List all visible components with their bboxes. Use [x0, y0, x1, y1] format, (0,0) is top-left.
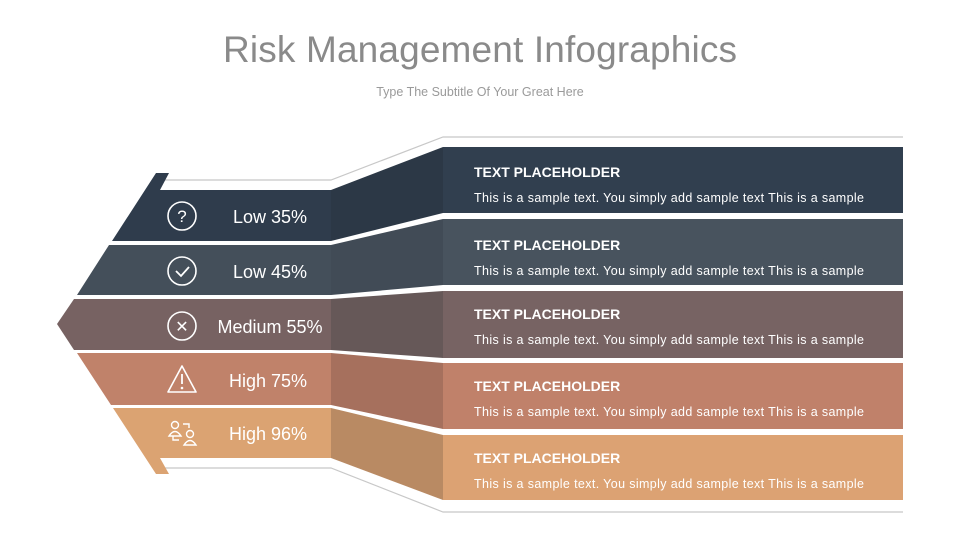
band 4: High 75%: High 75% — [229, 371, 307, 391]
title: Risk Management Infographics — [223, 29, 737, 70]
band 3: Medium 55% — [57, 291, 903, 358]
band 3: Medium 55%: Medium 55% — [217, 317, 323, 337]
band 1: Low 35%: ? — [177, 207, 187, 226]
band 5: High 96%: High 96% — [229, 424, 307, 444]
band 4: High 75%: TEXT PLACEHOLDER — [474, 378, 620, 394]
band 2: Low 45% — [77, 219, 903, 295]
band 3: Medium 55%: TEXT PLACEHOLDER — [474, 306, 620, 322]
band 2: Low 45%: This is a sample text. You simply add sample text This is a sample — [474, 264, 864, 278]
band 3: Medium 55%: This is a sample text. You simply add sample text This is a sample — [474, 333, 864, 347]
band 2: Low 45%: TEXT PLACEHOLDER — [474, 237, 620, 253]
band 5: High 96%: This is a sample text. You simply add sample text This is a sample — [474, 477, 864, 491]
band 1: Low 35% — [112, 147, 903, 241]
band 5: High 96%: TEXT PLACEHOLDER — [474, 450, 620, 466]
outline lines — [160, 137, 903, 512]
band 1: Low 35%: This is a sample text. You simply add sample text This is a sample — [474, 191, 864, 205]
band 1: Low 35%: TEXT PLACEHOLDER — [474, 164, 620, 180]
band 5: High 96% — [113, 408, 903, 500]
band 3: Medium 55%: ✕ — [175, 319, 189, 336]
subtitle: Type The Subtitle Of Your Great Here — [376, 85, 584, 99]
band 1: Low 35%: Low 35% — [233, 207, 307, 227]
band 2: Low 45%: Low 45% — [233, 262, 307, 282]
band 4: High 75% — [77, 353, 903, 429]
band 4: High 75%: This is a sample text. You simply add sample text This is a sample — [474, 405, 864, 419]
